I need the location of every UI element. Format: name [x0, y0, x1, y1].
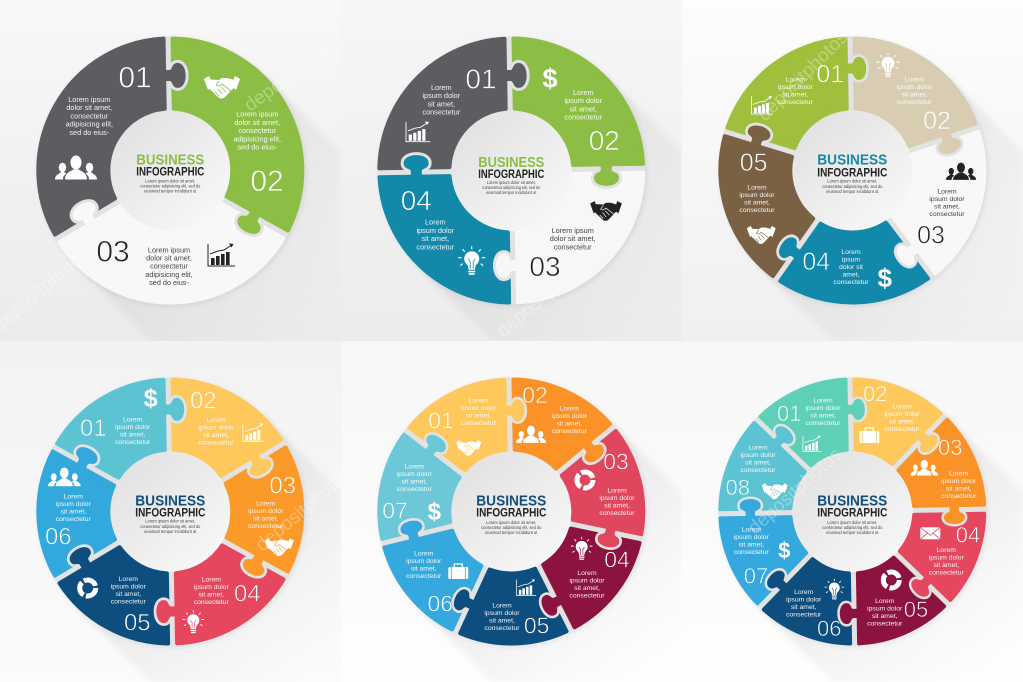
center title: [136, 151, 204, 194]
segment 06 text: ipsum dolor: [406, 558, 442, 565]
panel: three-piece puzzle circle: [0, 28, 341, 341]
segment 05 number: 05: [904, 597, 928, 622]
segment 02 text: consectetur: [198, 440, 234, 446]
center title: BUSINESS: [136, 151, 204, 168]
center title: BUSINESS: [478, 154, 544, 171]
segment 02 text: consectetur: [564, 113, 603, 122]
icon: handshake: [590, 201, 622, 221]
segment 01 text: sit amet,: [782, 92, 808, 99]
segment 07 text: consectetur: [734, 549, 770, 556]
segment 06 text: sit amet,: [791, 604, 817, 611]
segment 08 text: sit amet,: [745, 460, 771, 467]
icon: envelope: [920, 527, 940, 539]
segment 04 text: amet,: [842, 272, 860, 278]
icon: briefcase: [448, 564, 468, 579]
panel: six-piece puzzle circle: [0, 341, 341, 682]
segment 03 text: ipsum dolor: [599, 495, 635, 502]
segment 07 text: ipsum dolor: [734, 534, 770, 541]
icon: handshake: [265, 538, 294, 556]
segment 02 text: Lorem: [573, 88, 594, 97]
segment 01 text: Lorem: [813, 397, 833, 404]
segment 03 text: Lorem: [256, 500, 276, 507]
segment 05 text: consectetur: [739, 207, 775, 214]
segment 02 number: 02: [589, 125, 620, 156]
segment 04 text: consectetur: [416, 242, 455, 251]
segment 03 text: consectetur: [599, 510, 635, 517]
center title: consectetur adipisicing elit, sed do: [481, 525, 542, 530]
segment 03 text: sit amet,: [604, 502, 630, 509]
segment 05 text: consectetur: [111, 598, 147, 606]
icon: light bulb: [571, 537, 592, 560]
center title: BUSINESS: [817, 492, 887, 509]
segment 04 text: consectetur: [194, 599, 230, 606]
panel: four-piece puzzle circle: [341, 0, 682, 341]
segment 06 text: Lorem: [414, 551, 434, 558]
panel: five-piece puzzle circle: [682, 36, 1023, 341]
segment 07 number: 07: [382, 498, 408, 524]
segment 07 number: 07: [744, 564, 768, 589]
segment 03 number: 03: [96, 236, 130, 269]
icon: people: [910, 460, 938, 476]
segment 06 text: Lorem: [64, 493, 83, 500]
segment 04 text: Lorem: [577, 570, 597, 577]
icon: people: [946, 163, 976, 180]
center title: eiusmod tempor incididunt ut: [144, 529, 197, 534]
segment 01 text: dolor sit amet,: [66, 103, 112, 112]
segment 07 text: ipsum dolor: [397, 471, 433, 478]
segment 02 text: Lorem: [560, 406, 579, 413]
center title: INFOGRAPHIC: [478, 169, 544, 181]
segment 06 text: sit amet,: [411, 566, 437, 573]
segment 02 text: sit amet,: [570, 104, 597, 113]
watermark text: depositphotos: [241, 30, 349, 116]
segment 04 text: Lorem: [202, 576, 221, 583]
icon: handshake: [762, 483, 788, 499]
segment 04 text: dolor sit: [839, 264, 863, 271]
segment 03 number: 03: [603, 448, 629, 474]
center title: Lorem ipsum dolor sit amet,: [486, 520, 536, 525]
segment 02 text: consectetur: [884, 426, 920, 433]
segment 07 text: sit amet,: [738, 542, 764, 549]
segment 04 text: consectetur: [569, 592, 605, 600]
icon: bar chart: [517, 579, 536, 596]
segment 04 text: Lorem: [937, 547, 956, 554]
segment 05 text: sit amet,: [744, 200, 770, 207]
segment 01 text: Lorem: [431, 83, 452, 92]
segment 04 number: 04: [604, 547, 630, 573]
segment 03 text: dolor sit amet,: [550, 234, 596, 243]
segment 02 number: 02: [250, 165, 284, 198]
segment 03 text: ipsum dolor: [248, 508, 284, 515]
segment 01 number: 01: [118, 61, 152, 94]
segment 04 text: consectetur: [833, 279, 869, 286]
segment 05 text: consectetur: [867, 620, 903, 628]
icon: light bulb: [182, 610, 204, 633]
segment 03 text: sed do eius-: [149, 278, 189, 287]
segment 01 number: 01: [428, 408, 454, 434]
segment 03 text: Lorem: [607, 487, 627, 494]
segment 01 text: consectetur: [461, 420, 497, 427]
segment 02 number: 02: [923, 107, 951, 135]
icon: bar chart: [406, 121, 430, 142]
icon: dollar: $: [542, 64, 558, 94]
center title: BUSINESS: [476, 492, 546, 509]
segment 03 text: ipsum dolor: [929, 196, 965, 203]
center title: BUSINESS: [135, 492, 205, 509]
segment 04 text: sit amet,: [422, 234, 449, 243]
segment 04 text: ipsum: [842, 256, 860, 264]
watermark text: depositphotos: [493, 250, 597, 342]
segment 06 number: 06: [428, 591, 453, 617]
segment 04 number: 04: [401, 185, 432, 216]
segment 01 number: 01: [777, 401, 802, 426]
segment 02 text: sit amet,: [203, 432, 229, 439]
icon: cycle: [80, 580, 96, 596]
segment 01 text: sit amet,: [428, 99, 455, 108]
puzzle ring: [358, 348, 680, 676]
puzzle ring: [693, 352, 1012, 671]
puzzle ring: [672, 9, 1019, 353]
segment 06 text: ipsum dolor: [56, 501, 92, 508]
icon: briefcase: [859, 428, 879, 443]
segment 03 text: Lorem: [937, 189, 957, 196]
segment 03 number: 03: [917, 221, 945, 249]
center title: eiusmod tempor incididunt ut: [826, 189, 879, 194]
center title: eiusmod tempor incididunt ut: [485, 530, 538, 535]
segment 07 text: Lorem: [742, 527, 761, 534]
center title: consectetur adipisicing elit, sed do: [822, 525, 883, 530]
segment 02 text: ipsum dolor: [552, 413, 588, 420]
segment 01 text: consectetur: [805, 420, 841, 427]
icon: handshake: [204, 76, 240, 98]
watermark text: depositphotos: [252, 464, 356, 556]
segment 08 text: consectetur: [740, 467, 776, 474]
segment 02 text: Lorem ipsum: [236, 110, 278, 119]
icon: bar chart: [803, 436, 822, 451]
segment 06 text: Lorem: [794, 589, 814, 596]
segment 06 text: consectetur: [786, 612, 822, 618]
segment 05 text: ipsum dolor: [484, 610, 520, 617]
segment 08 number: 08: [725, 475, 750, 500]
segment 02 number: 02: [522, 382, 548, 408]
segment 02 text: ipsum dolor: [198, 424, 234, 432]
segment 04 text: ipsum dolor: [569, 578, 605, 584]
center title: INFOGRAPHIC: [817, 168, 887, 180]
segment 01 text: ipsum dolor: [805, 405, 841, 412]
segment 03 number: 03: [269, 473, 296, 500]
segment 02 text: sit amet,: [556, 421, 582, 428]
segment 03 text: consectetur: [929, 211, 965, 218]
segment 04 text: ipsum dolor: [194, 584, 230, 591]
segment 01 number: 01: [465, 63, 497, 94]
segment 03 text: Lorem: [949, 471, 969, 478]
center title: [476, 492, 546, 535]
segment 01 text: ipsum dolor: [778, 84, 814, 91]
segment 06 number: 06: [817, 616, 842, 641]
center title: Lorem ipsum dolor sit amet,: [827, 520, 877, 525]
segment 04 text: Lorem: [841, 249, 861, 256]
segment 04 text: consectetur: [929, 570, 965, 576]
segment 05 number: 05: [124, 609, 151, 636]
center title: INFOGRAPHIC: [135, 508, 205, 520]
icon: cycle: [577, 472, 593, 488]
center title: eiusmod tempor incididunt ut: [486, 190, 537, 195]
segment 03 text: consectetur: [554, 242, 592, 251]
icon: cycle: [883, 572, 899, 588]
icon: people: [516, 426, 546, 443]
segment 03 text: Lorem ipsum: [148, 245, 190, 254]
panel: seven-piece puzzle circle: [376, 374, 682, 680]
icon: bar chart: [243, 423, 264, 441]
segment 01 text: sed do eius-: [69, 128, 110, 137]
center title: consectetur adipisicing elit, sed do: [140, 184, 201, 188]
icon: light bulb: [877, 53, 899, 77]
center title: [817, 151, 887, 194]
segment 01 text: consectetur: [70, 111, 109, 120]
segment 05 text: consectetur: [484, 625, 520, 632]
segment 04 text: sit amet,: [933, 562, 959, 569]
segment 01 text: Lorem: [123, 416, 143, 423]
icon: dollar: $: [428, 498, 442, 526]
puzzle ring: [377, 36, 645, 305]
center title: Lorem ipsum dolor sit amet,: [145, 518, 195, 524]
segment 08 text: ipsum dolor: [740, 452, 776, 459]
segment 01 text: ipsum dolor: [115, 424, 151, 431]
icon: light bulb: [458, 246, 485, 275]
segment 01 text: Lorem ipsum: [68, 95, 110, 104]
segment 01 text: sit amet,: [465, 412, 491, 419]
icon: handshake: [747, 226, 776, 244]
segment 03 text: ipsum dolor: [941, 478, 977, 485]
center title: consectetur adipisicing elit, sed do: [140, 524, 201, 529]
panel: eight-piece puzzle circle: [718, 374, 1023, 680]
segment 02 text: ipsum dolor: [564, 96, 603, 105]
puzzle ring: [0, 346, 343, 677]
segment 02 text: ipsum dolor: [897, 84, 933, 91]
icon: bar chart: [208, 244, 235, 266]
segment 06 text: consectetur: [56, 516, 92, 523]
segment 02 text: sed do eius-: [237, 142, 278, 152]
segment 06 text: consectetur: [406, 573, 442, 580]
center title: Lorem ipsum dolor sit amet,: [487, 180, 536, 185]
segment 04 text: ipsum dolor: [416, 226, 455, 235]
center title: INFOGRAPHIC: [817, 508, 887, 520]
center title: [478, 154, 544, 195]
icon: dollar: $: [144, 384, 158, 412]
segment 07 text: sit amet,: [401, 479, 427, 486]
segment 01 text: ipsum dolor: [422, 91, 461, 100]
segment 02 text: consectetur: [552, 428, 588, 435]
segment 04 number: 04: [956, 522, 980, 547]
segment 03 number: 03: [529, 251, 561, 282]
center title: Lorem ipsum dolor sit amet,: [145, 178, 195, 184]
segment 02 text: Lorem: [905, 77, 924, 84]
segment 01 number: 01: [80, 415, 107, 442]
segment 02 text: ipsum dolor: [884, 411, 920, 418]
icon: dollar: $: [877, 263, 892, 293]
center title: [135, 492, 205, 534]
segment 02 text: consectetur: [897, 99, 933, 106]
segment 01 text: consectetur: [778, 99, 814, 106]
segment 06 text: ipsum dolor: [786, 596, 822, 604]
segment 05 text: Lorem: [119, 576, 138, 583]
segment 01 text: adipisicing elit,: [66, 120, 113, 129]
segment 05 number: 05: [524, 612, 549, 638]
segment 06 number: 06: [45, 523, 72, 550]
segment 03 text: consectetur: [941, 493, 977, 500]
segment 06 text: sit amet,: [60, 508, 86, 515]
segment 05 text: sit amet,: [115, 591, 141, 598]
segment 03 text: adipisicing elit,: [145, 270, 193, 279]
segment 01 text: consectetur: [422, 108, 461, 117]
segment 02 text: dolor sit amet,: [234, 118, 280, 127]
segment 02 number: 02: [190, 387, 217, 414]
watermark text: depositphotos: [744, 444, 846, 539]
segment 05 text: sit amet,: [489, 618, 515, 625]
center title: consectetur adipisicing elit, sed do: [822, 184, 883, 189]
segment 02 text: consectetur: [238, 126, 277, 135]
icon: light bulb: [825, 579, 844, 599]
segment 02 text: adipisicing elit,: [234, 134, 281, 143]
segment 01 text: Lorem: [786, 77, 805, 84]
icon: bar chart: [752, 96, 773, 114]
segment 04 text: ipsum dolor: [929, 554, 965, 562]
segment 03 text: consectetur: [248, 523, 284, 530]
center title: Lorem ipsum dolor sit amet,: [827, 178, 877, 184]
segment 04 number: 04: [802, 248, 830, 276]
segment 02 text: Lorem: [892, 403, 912, 410]
segment 05 text: ipsum dolor: [111, 584, 147, 590]
segment 01 text: ipsum dolor: [461, 405, 497, 412]
icon: dollar: $: [778, 538, 790, 563]
segment 01 text: sit amet,: [810, 412, 836, 419]
segment 03 text: dolor sit amet,: [146, 254, 192, 262]
segment 05 text: Lorem: [747, 185, 767, 192]
segment 03 text: sit amet,: [253, 515, 279, 522]
segment 01 text: Lorem: [469, 397, 488, 404]
puzzle ring: [0, 23, 305, 354]
segment 05 text: ipsum dolor: [867, 606, 903, 612]
segment 01 number: 01: [816, 61, 844, 89]
segment 02 text: Lorem: [206, 417, 226, 424]
segment 08 text: Lorem: [748, 445, 768, 452]
segment 05 text: Lorem: [492, 603, 512, 610]
center title: eiusmod tempor incididunt ut: [826, 530, 879, 535]
segment 07 text: consectetur: [397, 486, 433, 493]
segment 02 text: sit amet,: [889, 418, 915, 425]
segment 04 number: 04: [234, 581, 261, 608]
segment 05 number: 05: [740, 149, 768, 177]
segment 04 text: sit amet,: [574, 585, 600, 592]
center title: consectetur adipisicing elit, sed do: [482, 185, 541, 190]
center title: INFOGRAPHIC: [476, 508, 546, 520]
icon: handshake: [456, 440, 481, 456]
segment 07 text: Lorem: [405, 464, 424, 471]
segment 02 text: sit amet,: [901, 92, 927, 99]
center title: eiusmod tempor incididunt ut: [144, 188, 197, 194]
segment 03 number: 03: [938, 435, 963, 460]
segment 05 text: Lorem: [875, 598, 895, 605]
segment 01 text: consectetur: [115, 439, 151, 446]
segment 03 text: sit amet,: [946, 486, 972, 493]
center title: BUSINESS: [817, 151, 887, 168]
segment 01 text: sit amet,: [120, 431, 146, 438]
icon: people: [48, 468, 81, 486]
icon: people: [55, 156, 97, 180]
segment 03 text: Lorem ipsum: [552, 226, 594, 235]
watermark text: depositphotos: [754, 27, 852, 126]
segment 02 number: 02: [863, 382, 888, 407]
segment 03 text: sit amet,: [934, 204, 960, 211]
segment 04 text: sit amet,: [198, 591, 224, 598]
segment 05 text: sit amet,: [872, 613, 898, 620]
segment 04 text: Lorem: [425, 218, 446, 227]
center title: INFOGRAPHIC: [136, 167, 204, 179]
segment 05 text: ipsum dolor: [739, 192, 775, 199]
segment 03 text: consectetur: [150, 262, 188, 271]
center title: [817, 492, 887, 535]
